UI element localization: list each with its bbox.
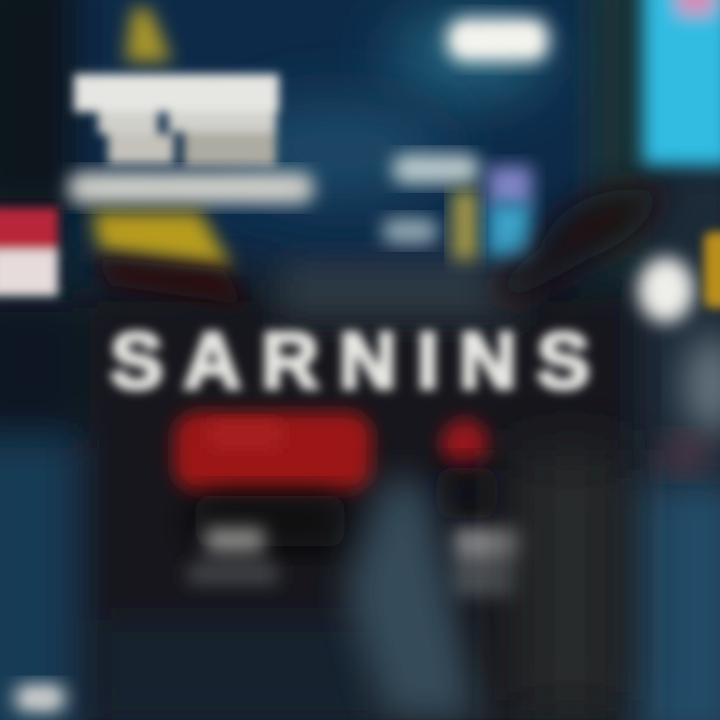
headline text block xyxy=(74,74,279,166)
yellow awning xyxy=(92,212,232,268)
pale window right xyxy=(684,335,720,435)
red traffic light figure xyxy=(436,419,498,518)
footer mark: AD xyxy=(24,686,56,711)
wet road reflection xyxy=(345,480,480,720)
subheading text: CITY NIGHTS xyxy=(102,173,278,204)
sign: top white pill: CAFE xyxy=(457,24,539,57)
dark red awning shadow xyxy=(95,258,245,305)
large title word: SARNINS xyxy=(110,316,590,405)
umbrella silhouette xyxy=(490,189,668,305)
car shadow xyxy=(195,496,345,546)
sign: top white pill xyxy=(447,18,549,62)
panel: headline sign xyxy=(68,8,314,305)
shop signs: centre right xyxy=(382,154,532,260)
flag: red and white xyxy=(0,208,58,296)
yellow sign edge xyxy=(704,232,720,308)
screen: top right cyan xyxy=(642,0,720,166)
red car xyxy=(174,412,372,546)
subheading text xyxy=(68,172,314,204)
icon: yellow pennant xyxy=(125,8,172,62)
red glow right xyxy=(665,439,705,471)
dark figure right xyxy=(515,450,625,720)
footer mark xyxy=(14,684,66,712)
street light: white blob xyxy=(638,257,694,323)
caption right xyxy=(452,528,522,596)
caption left xyxy=(188,528,278,584)
